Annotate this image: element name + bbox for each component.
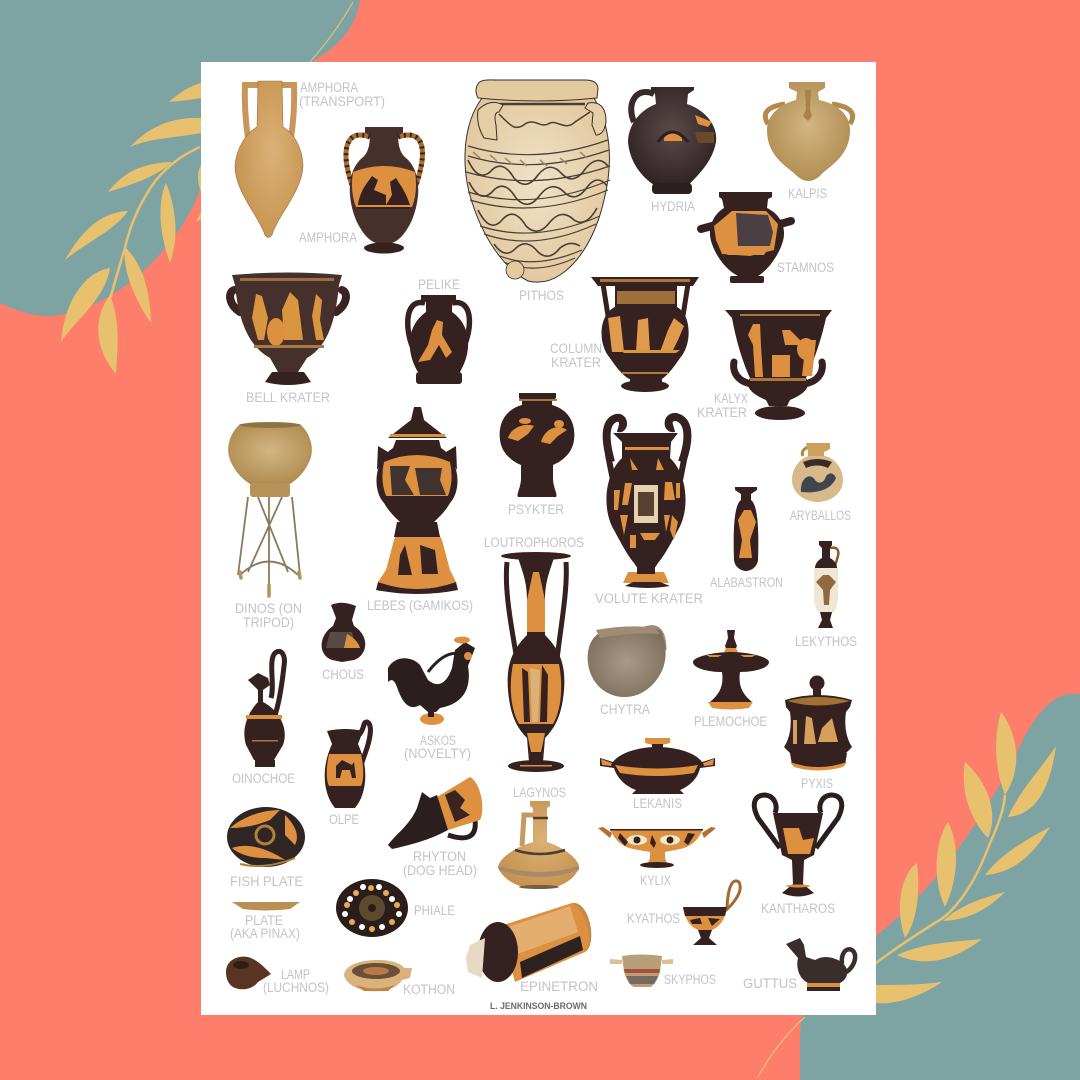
vase: lagynos [498, 801, 579, 889]
vase: skyphos [610, 954, 673, 987]
label: amphora: AMPHORA [299, 230, 357, 245]
label: lekanis: LEKANIS [633, 796, 682, 811]
vase: transport amphora [235, 81, 303, 238]
label: dinos on tripod: DINOS (ON [235, 601, 302, 616]
vase: pithos [465, 80, 610, 282]
label: kothon: KOTHON [403, 982, 455, 997]
label: kalyx krater [697, 391, 748, 420]
label: pyxis: PYXIS [801, 776, 833, 791]
label: stamnos: STAMNOS [777, 260, 834, 275]
vase: phiale [336, 879, 408, 937]
vase: kalyx krater [725, 310, 832, 420]
vase: lekythos [814, 541, 838, 628]
label: chous: CHOUS [322, 667, 364, 682]
label: kalyx krater: KALYX [714, 391, 748, 406]
vase: loutrophoros [501, 552, 571, 772]
vase: kylix [598, 827, 716, 868]
vase: amphora [346, 127, 422, 254]
vase: epinetron [466, 903, 591, 982]
vase: bell krater [230, 272, 346, 385]
label: epinetron: EPINETRON [520, 979, 598, 994]
vase: hydria [628, 87, 716, 194]
vase: rhyton dog head [388, 777, 482, 849]
label: pithos: PITHOS [519, 288, 564, 303]
label: bell krater: BELL KRATER [246, 390, 330, 405]
label: kalyx krater: KRATER [697, 405, 747, 420]
label: dinos on tripod: TRIPOD) [243, 615, 294, 630]
label: fish plate: FISH PLATE [230, 874, 303, 889]
label: lagynos: LAGYNOS [513, 785, 566, 800]
credit: L. JENKINSON-BROWN [490, 1001, 587, 1011]
label: plate: PLATE [245, 913, 283, 928]
label: lekythos: LEKYTHOS [795, 634, 857, 649]
label: amphora transport: AMPHORA [300, 80, 358, 95]
label: lamp [263, 967, 329, 995]
vase: olpe [325, 722, 370, 808]
vase: alabastron [734, 487, 758, 571]
vase: plemochoe [693, 630, 769, 710]
leaf branch: bottom right [758, 712, 1056, 1077]
label: psykter: PSYKTER [508, 502, 564, 517]
vase: guttus [786, 938, 855, 991]
poster panel [201, 62, 876, 1015]
label: aryballos: ARYBALLOS [790, 508, 851, 523]
label: column krater: COLUMN [550, 341, 602, 356]
vase: lebes gamikos [376, 407, 458, 594]
label: oinochoe: OINOCHOE [232, 771, 295, 786]
vase: column krater [591, 277, 699, 392]
label: guttus: GUTTUS [743, 976, 797, 991]
vase: pelike [408, 295, 469, 384]
vase: dinos on tripod [228, 422, 312, 596]
label: dinos on tripod [235, 601, 302, 630]
label: kyathos: KYATHOS [627, 911, 680, 926]
vase: psykter [500, 393, 574, 497]
vase: kantharos [754, 795, 842, 896]
vase: kalpis [765, 82, 853, 181]
teal blob: top left [0, 0, 360, 316]
label: lebes gamikos: LEBES (GAMIKOS) [367, 598, 473, 613]
label: plemochoe: PLEMOCHOE [694, 714, 767, 729]
label: plate: (AKA PINAX) [230, 926, 300, 941]
label: kantharos: KANTHAROS [761, 901, 835, 916]
vase: stamnos [701, 192, 791, 283]
label: column krater: KRATER [551, 355, 601, 370]
label: amphora transport: (TRANSPORT) [299, 94, 385, 109]
label: lamp: (LUCHNOS) [263, 980, 329, 995]
label: lamp: LAMP [281, 967, 310, 982]
label: askos: (NOVELTY) [404, 746, 471, 761]
label: rhyton [403, 849, 477, 878]
label: pelike: PELIKE [418, 277, 460, 292]
label: phiale: PHIALE [414, 903, 455, 918]
label: alabastron: ALABASTRON [710, 575, 783, 590]
label: askos: ASKOS [420, 733, 456, 748]
leaf branch: top left [61, 2, 353, 374]
label: column krater [550, 341, 602, 370]
vase: pyxis [784, 676, 852, 770]
label: rhyton: (DOG HEAD) [403, 863, 477, 878]
vase: kothon [344, 960, 412, 991]
label: skyphos: SKYPHOS [664, 972, 716, 987]
label: amphora transport [299, 80, 385, 109]
teal blob: bottom right [800, 694, 1080, 1080]
vase: lamp [226, 957, 271, 989]
label: kalpis: KALPIS [788, 186, 827, 201]
label: volute krater: VOLUTE KRATER [595, 591, 703, 606]
label: chytra: CHYTRA [600, 702, 650, 717]
vase: chytra [588, 626, 666, 697]
label: olpe: OLPE [329, 812, 359, 827]
vase: kyathos [683, 881, 740, 945]
label: hydria: HYDRIA [651, 199, 695, 214]
vase: plate [232, 902, 300, 910]
vase: chous [322, 603, 365, 662]
vase: oinochoe [244, 651, 285, 767]
vase: askos rooster [388, 636, 475, 725]
label: loutrophoros: LOUTROPHOROS [484, 535, 584, 550]
label: plate [230, 913, 300, 941]
label: askos [404, 733, 471, 761]
vase: aryballos [792, 443, 843, 502]
vase: lekanis [600, 738, 715, 794]
label: rhyton: RHYTON [413, 849, 466, 864]
label: kylix: KYLIX [640, 873, 671, 888]
vase: volute krater [606, 417, 687, 588]
vase: fish plate [227, 807, 305, 867]
